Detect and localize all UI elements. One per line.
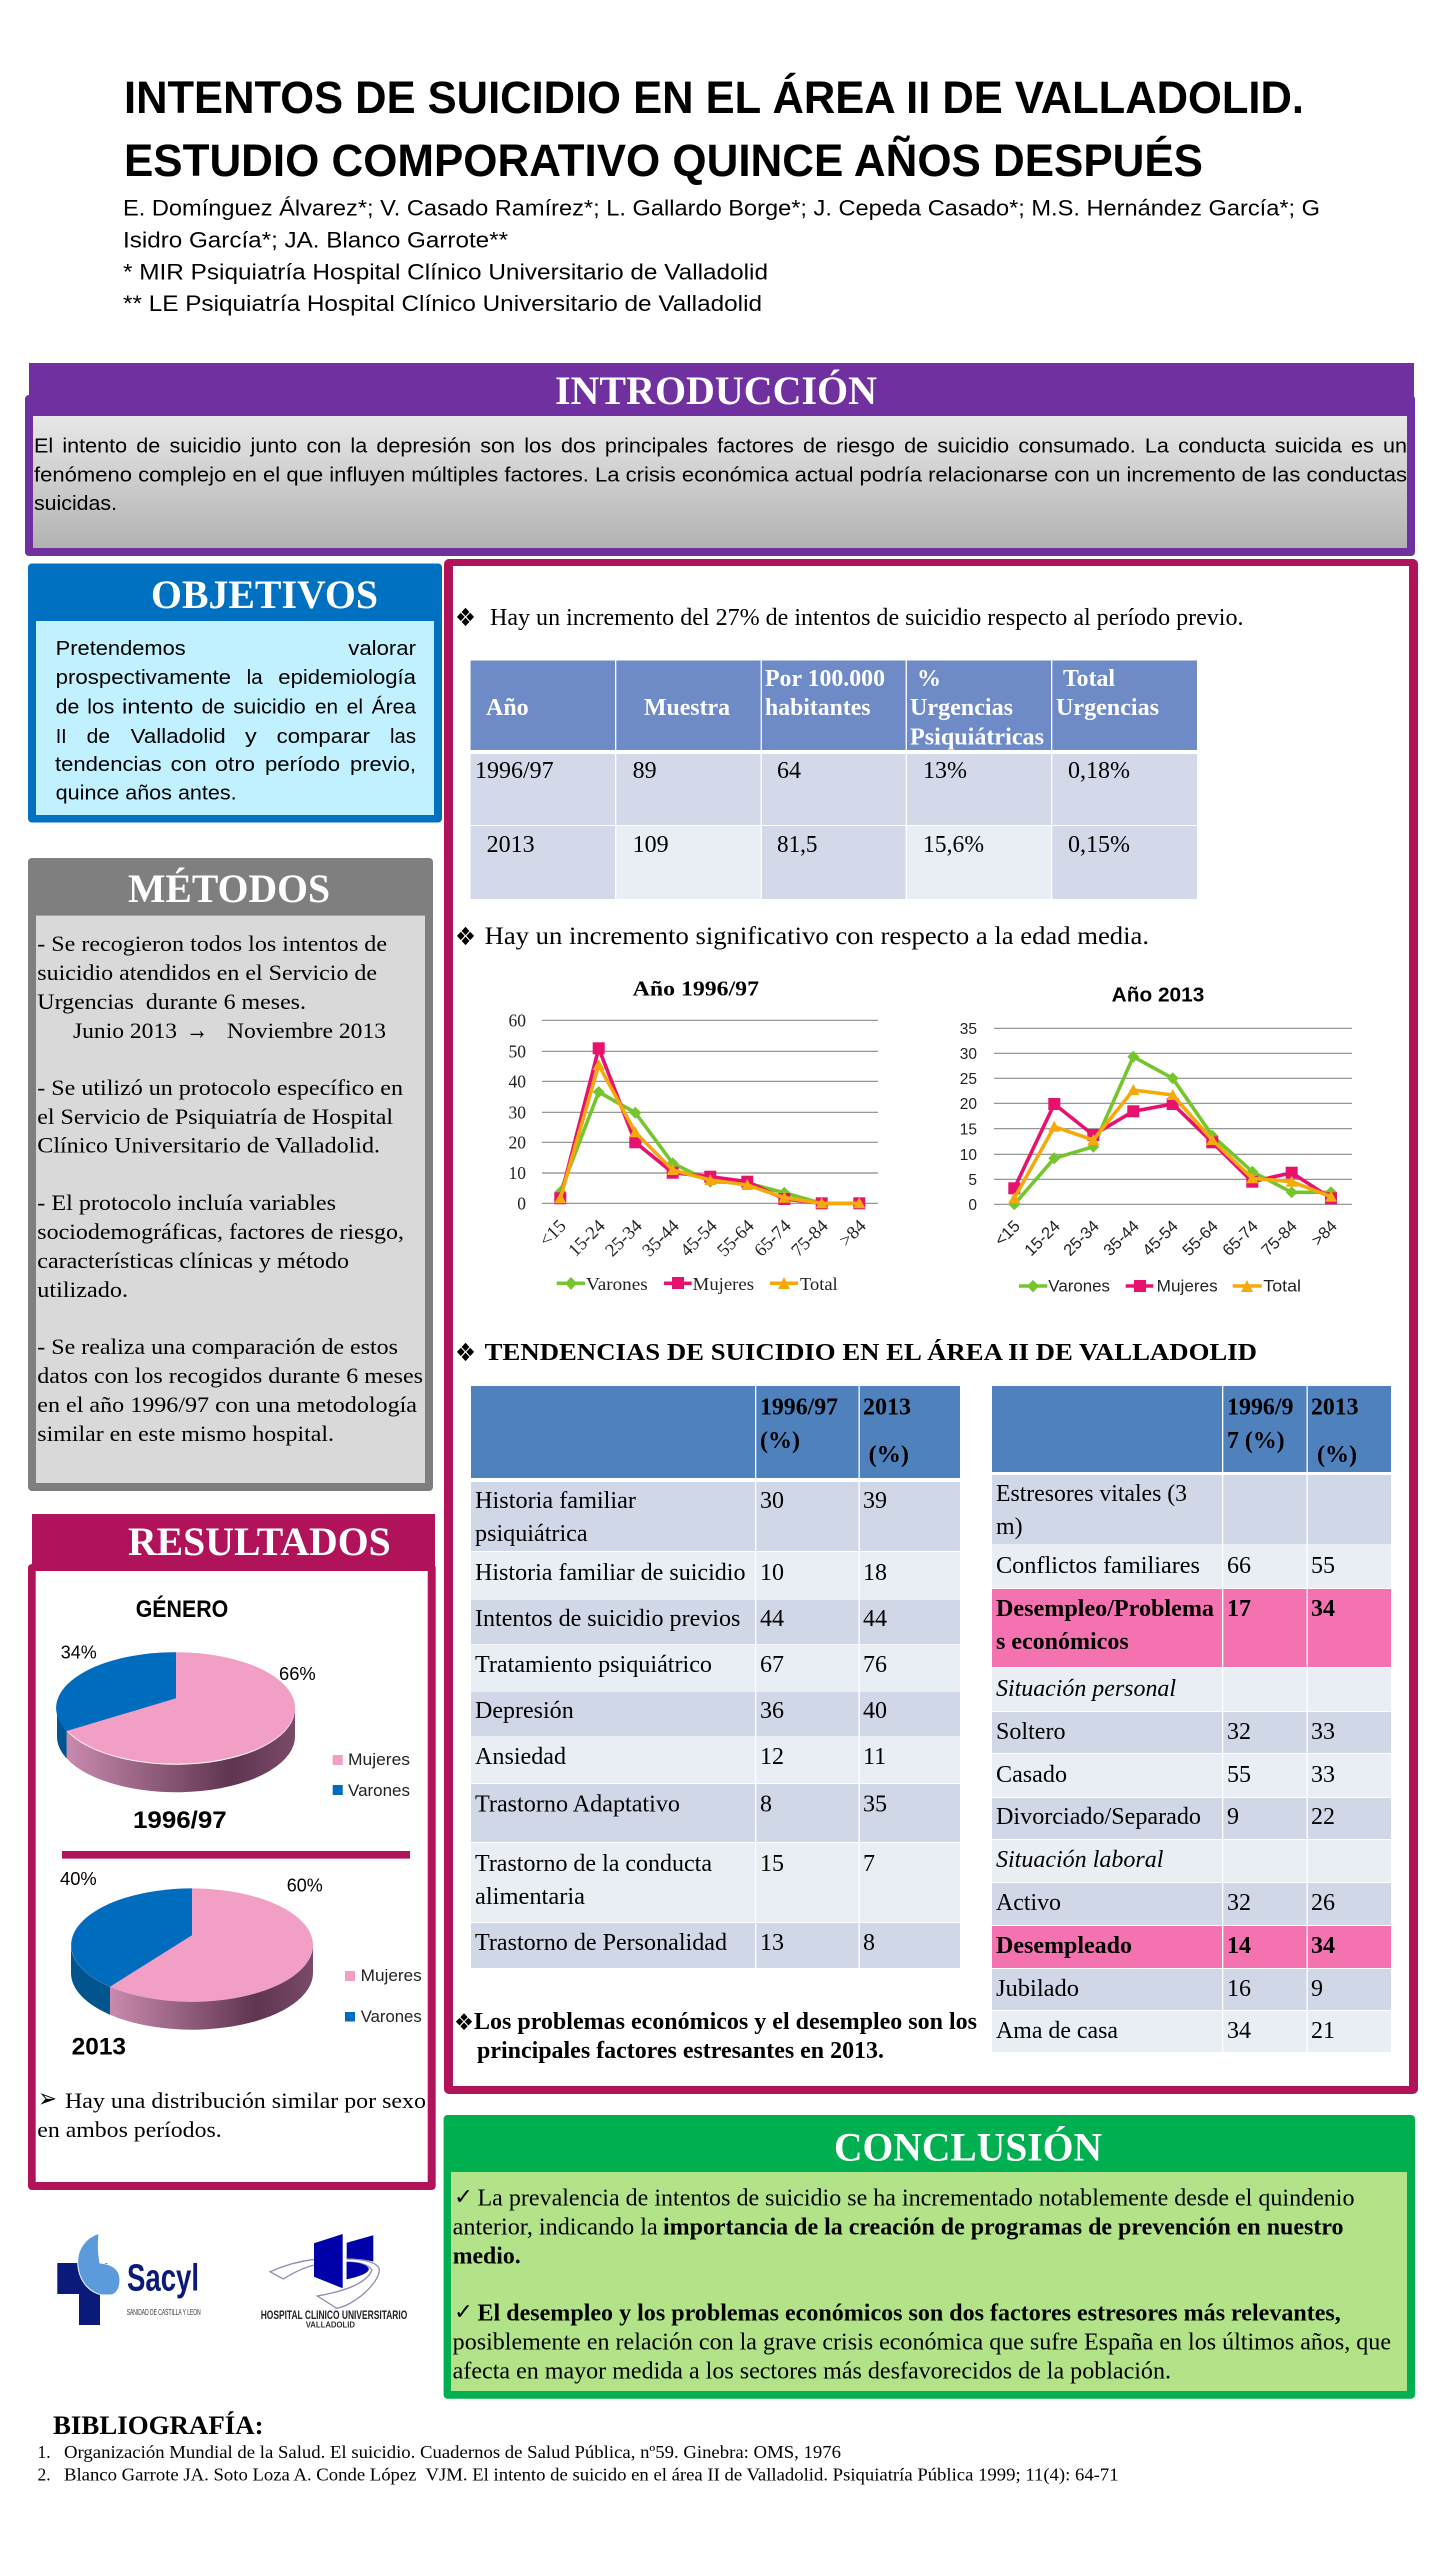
pie chart: 2013: 40% <box>60 1869 97 1889</box>
text: conclusión: posiblemente en relación con la grave crisis económica que sufre España en los últimos años, que <box>453 2329 1391 2355</box>
text: métodos: suicidio atendidos en el Servicio de <box>37 960 377 985</box>
table: estresores: Situación laboral <box>996 1847 1164 1873</box>
table: factores clínicos: 15 <box>760 1851 784 1877</box>
text: objetivos: con <box>171 753 207 776</box>
text: objetivos: tendencias <box>55 753 162 776</box>
line chart: año 1996/97: 60 <box>508 1010 526 1030</box>
text: métodos: el Servicio de Psiquiatría de Hospital <box>37 1104 393 1129</box>
line chart: año 1996/97: >84 <box>836 1216 871 1251</box>
table: muestra: Por 100.000 <box>765 666 885 692</box>
text: métodos: - Se recogieron todos los intentos de <box>37 931 387 956</box>
line chart: año 1996/97: Total <box>800 1274 838 1294</box>
table: factores clínicos: Trastorno de Personalidad <box>475 1930 727 1956</box>
table: estresores: 1996/9 <box>1227 1395 1294 1421</box>
logo: Sacyl: Sacyl <box>127 2258 199 2300</box>
text: conclusión: afecta en mayor medida a los sectores más desfavorecidos de la población. <box>453 2358 1171 2384</box>
line chart: año 2013: 0 <box>968 1197 977 1214</box>
line chart: año 2013: 5 <box>968 1172 977 1189</box>
table: estresores: Estresores vitales (3 <box>996 1481 1187 1507</box>
text: objetivos: prospectivamente <box>56 666 231 689</box>
pie chart: 2013 <box>60 1869 323 2030</box>
text: objetivos: período <box>265 753 340 776</box>
table: estresores: 33 <box>1311 1762 1335 1788</box>
table: estresores: Desempleo/Problema <box>996 1596 1214 1622</box>
table: muestra: 109 <box>633 832 669 858</box>
table: factores clínicos: 7 <box>863 1851 875 1877</box>
table: factores clínicos: 39 <box>863 1488 887 1514</box>
table: factores clínicos: 44 <box>863 1606 887 1632</box>
text: métodos <box>37 931 423 1446</box>
table: estresores: 14 <box>1227 1933 1251 1959</box>
panel: introducción <box>25 363 1415 556</box>
text: métodos: - Se realiza una comparación de estos <box>37 1334 398 1359</box>
table: factores clínicos: Trastorno de la conducta <box>475 1851 712 1877</box>
table: factores clínicos: Intentos de suicidio previos <box>475 1606 740 1632</box>
text: distribución por sexo <box>37 2084 426 2142</box>
table: estresores: 66 <box>1227 1553 1251 1579</box>
text: métodos: Clínico Universitario de Valladolid. <box>37 1133 380 1158</box>
line chart: año 1996/97: 10 <box>508 1163 526 1183</box>
table: factores clínicos: 30 <box>760 1488 784 1514</box>
table: factores clínicos: 40 <box>863 1698 887 1724</box>
line chart: año 1996/97: 25-34 <box>602 1216 647 1261</box>
line chart: año 2013: 10 <box>960 1147 977 1164</box>
legend: 1996/97 <box>333 1750 410 1800</box>
table: estresores: (%) <box>1317 1442 1357 1468</box>
line chart: año 1996/97: Año 1996/97 <box>633 977 759 1001</box>
line chart: año 2013: 75-84 <box>1258 1217 1301 1260</box>
text: métodos: Junio 2013 <box>73 1018 177 1043</box>
text: métodos: Noviembre 2013 <box>227 1018 386 1043</box>
table: estresores: 2013 <box>1311 1395 1358 1421</box>
bibliography: 1. <box>38 2442 51 2462</box>
table: estresores: 26 <box>1311 1890 1335 1916</box>
table: estresores <box>992 1386 1391 2052</box>
table: estresores: 33 <box>1311 1719 1335 1745</box>
text: conclusión: ✓ <box>454 2185 473 2210</box>
table: factores clínicos: 8 <box>863 1930 875 1956</box>
table: estresores: 17 <box>1227 1596 1251 1622</box>
table: estresores: Jubilado <box>996 1976 1079 2002</box>
table: factores clínicos: 36 <box>760 1698 784 1724</box>
line chart: año 2013: 65-74 <box>1219 1217 1262 1260</box>
line chart: año 1996/97: <15 <box>536 1216 571 1251</box>
table: factores clínicos: Trastorno Adaptativo <box>475 1792 680 1818</box>
label: 1996/97: 1996/97 <box>133 1807 227 1834</box>
text: distribución por sexo: ➢ <box>38 2084 57 2114</box>
logo: Sacyl <box>57 2233 201 2325</box>
table: estresores: 9 <box>1227 1804 1239 1830</box>
text: factores estresantes: principales factores estresantes en 2013. <box>477 2038 884 2064</box>
pie chart: 1996/97: 66% <box>279 1664 316 1684</box>
line chart: año 1996/97 <box>508 977 878 1294</box>
heading: objetivos: OBJETIVOS <box>151 572 378 617</box>
text: objetivos <box>55 637 417 804</box>
text: métodos: en el año 1996/97 con una metodología <box>37 1392 417 1417</box>
line chart: año 2013: 15 <box>960 1122 977 1138</box>
line chart: año 1996/97: 0 <box>517 1194 526 1214</box>
line chart: año 1996/97: 50 <box>508 1042 526 1062</box>
table: muestra <box>471 660 1197 900</box>
table: estresores: 21 <box>1311 2018 1335 2044</box>
text: métodos: → <box>186 1015 208 1046</box>
text: métodos: datos con los recogidos durante 6 meses <box>37 1363 423 1388</box>
line chart: año 2013: 20 <box>960 1096 977 1113</box>
line chart: año 1996/97: 75-84 <box>788 1216 833 1261</box>
logo: Hospital Clínico Universitario: VALLADOLID <box>306 2320 355 2330</box>
table: muestra: Urgencias <box>1056 695 1159 721</box>
pie chart: 2013: 60% <box>287 1876 323 1896</box>
heading: tendencias: ❖ <box>455 1338 476 1367</box>
line chart: año 1996/97: 55-64 <box>714 1216 759 1261</box>
authors and affiliations: ** LE Psiquiatría Hospital Clínico Universitario de Valladolid <box>123 291 762 316</box>
table: estresores: Activo <box>996 1890 1061 1916</box>
text: objetivos: Área <box>372 696 417 718</box>
table: estresores: m) <box>996 1514 1023 1540</box>
table: muestra: 64 <box>777 758 801 784</box>
bibliography: Blanco Garrote JA. Soto Loza A. Conde López VJM. El intento de suicido en el área II de Valladolid. Psiquiatría Pública 1999; 11(4): 64-71 <box>64 2465 1119 2485</box>
line chart: año 2013: 45-54 <box>1139 1217 1182 1260</box>
table: estresores: Soltero <box>996 1719 1066 1745</box>
title: ESTUDIO COMPORATIVO QUINCE AÑOS DESPUÉS <box>124 135 1203 186</box>
legend: 2013 <box>345 1966 422 2026</box>
table: factores clínicos <box>471 1386 960 1968</box>
legend: 1996/97: Mujeres <box>348 1750 410 1769</box>
logo: Sacyl: SANIDAD DE CASTILLA Y LEON <box>127 2308 201 2317</box>
panel: conclusión <box>444 2115 1415 2399</box>
bibliography: BIBLIOGRAFÍA: <box>53 2411 264 2440</box>
text: introducción: El intento de suicidio junto con la depresión son los dos principales factores de riesgo de suicidio consumado. La conducta suicida es un <box>34 436 1407 458</box>
table: muestra: 0,15% <box>1068 832 1130 858</box>
panel: resultados género <box>28 1514 436 2190</box>
table: estresores: 55 <box>1311 1553 1335 1579</box>
text: distribución por sexo: en ambos períodos. <box>37 2117 222 2142</box>
text: incremento 27%: ❖ <box>455 603 476 632</box>
text: incremento 27%: Hay un incremento del 27% de intentos de suicidio respecto al período previo. <box>490 605 1244 631</box>
table: estresores: Casado <box>996 1762 1067 1788</box>
text: objetivos: comparar <box>277 725 370 748</box>
line chart: año 2013: 25 <box>960 1071 977 1088</box>
text: conclusión: medio. <box>453 2243 521 2269</box>
table: factores clínicos: Historia familiar de suicidio <box>475 1560 746 1586</box>
table: estresores: 7 (%) <box>1227 1428 1285 1454</box>
text: objetivos: suicidio <box>233 696 306 718</box>
line chart: año 2013: 55-64 <box>1179 1217 1222 1260</box>
line chart: año 2013 <box>960 985 1352 1296</box>
text: objetivos: Valladolid <box>131 725 226 748</box>
text: factores estresantes: ❖ <box>454 2010 474 2036</box>
authors and affiliations <box>123 196 1320 316</box>
text: conclusión: El desempleo y los problemas económicos son dos factores estresores más relevantes, <box>478 2301 1341 2327</box>
text: métodos: Urgencias durante 6 meses. <box>37 989 306 1014</box>
table: muestra: 15,6% <box>923 832 984 858</box>
table: factores clínicos: 18 <box>863 1560 887 1586</box>
table: factores clínicos: Depresión <box>475 1698 574 1724</box>
text: objetivos: de <box>56 696 79 718</box>
text: introducción: fenómeno complejo en el que influyen múltiples factores. La crisis económica actual podría relacionarse con un incremento de las conductas <box>34 464 1407 486</box>
text: objetivos: Pretendemos <box>56 637 186 660</box>
heading: introducción: INTRODUCCIÓN <box>555 368 877 413</box>
line chart: año 2013: 15-24 <box>1021 1217 1064 1260</box>
table: factores clínicos: Historia familiar <box>475 1488 636 1514</box>
table: muestra: Total <box>1063 666 1115 692</box>
table: factores clínicos: 8 <box>760 1792 772 1818</box>
authors and affiliations: E. Domínguez Álvarez*; V. Casado Ramírez*; L. Gallardo Borge*; J. Cepeda Casado*; M.S. Hernández García*; G <box>123 196 1320 220</box>
table: factores clínicos: alimentaria <box>475 1884 585 1910</box>
text: conclusión: ✓ <box>454 2300 473 2325</box>
table: estresores: Conflictos familiares <box>996 1553 1200 1579</box>
heading: género: GÉNERO <box>136 1595 228 1623</box>
line chart: año 1996/97: 65-74 <box>751 1216 796 1261</box>
text: edad media: Hay un incremento significativo con respecto a la edad media. <box>485 923 1149 950</box>
line chart: año 1996/97: 20 <box>508 1132 526 1152</box>
table: factores clínicos: 13 <box>760 1930 784 1956</box>
table: factores clínicos: 10 <box>760 1560 784 1586</box>
line chart: año 1996/97: 40 <box>508 1072 526 1092</box>
text: métodos: similar en este mismo hospital. <box>37 1421 334 1446</box>
table: estresores: 34 <box>1311 1933 1335 1959</box>
text: objetivos: valorar <box>348 637 416 660</box>
table: estresores: Desempleado <box>996 1933 1132 1959</box>
table: muestra: Urgencias <box>910 695 1013 721</box>
table: muestra: Psiquiátricas <box>910 725 1044 751</box>
table: estresores: 32 <box>1227 1890 1251 1916</box>
text: edad media: ❖ <box>455 922 476 951</box>
bibliography <box>38 2411 1119 2485</box>
table: muestra: habitantes <box>765 695 870 721</box>
table: estresores: Divorciado/Separado <box>996 1804 1201 1830</box>
text: objetivos: intento <box>122 696 193 718</box>
table: muestra: 81,5 <box>777 832 818 858</box>
authors and affiliations: Isidro García*; JA. Blanco Garrote** <box>123 228 508 252</box>
table: muestra: 0,18% <box>1068 758 1130 784</box>
text: objetivos: las <box>390 725 416 748</box>
table: factores clínicos: Ansiedad <box>475 1744 566 1770</box>
table: estresores: 32 <box>1227 1719 1251 1745</box>
heading: métodos: MÉTODOS <box>128 866 330 911</box>
line chart: año 2013: 35 <box>960 1021 977 1038</box>
pie chart: 1996/97: 34% <box>61 1642 97 1662</box>
line chart: año 1996/97: 35-44 <box>639 1216 684 1261</box>
table: estresores: Ama de casa <box>996 2018 1118 2044</box>
table: factores clínicos: (%) <box>869 1442 909 1468</box>
table: estresores: Situación personal <box>996 1676 1176 1702</box>
text: introducción: suicidas. <box>34 493 117 515</box>
table: muestra: 2013 <box>487 832 535 858</box>
table: factores clínicos: 2013 <box>863 1395 911 1421</box>
line chart: año 1996/97: 30 <box>508 1102 526 1122</box>
table: estresores: 55 <box>1227 1762 1251 1788</box>
line chart: año 2013: Mujeres <box>1157 1278 1218 1296</box>
table: factores clínicos: 12 <box>760 1744 784 1770</box>
table: muestra: Muestra <box>644 695 730 721</box>
text: objetivos: en <box>315 696 338 718</box>
legend: 2013: Varones <box>361 2007 422 2026</box>
panel: métodos <box>28 858 433 1491</box>
bibliography: Organización Mundial de la Salud. El suicidio. Cuadernos de Salud Pública, nº59. Ginebra: OMS, 1976 <box>64 2442 841 2462</box>
text: métodos: utilizado. <box>37 1277 128 1302</box>
table: muestra: 13% <box>923 758 967 784</box>
title: INTENTOS DE SUICIDIO EN EL ÁREA II DE VALLADOLID. <box>124 72 1304 123</box>
text: métodos: sociodemográficas, factores de riesgo, <box>37 1219 404 1244</box>
line chart: año 1996/97: 45-54 <box>677 1216 722 1261</box>
line chart: año 2013: 25-34 <box>1060 1217 1103 1260</box>
text: factores estresantes <box>454 2009 977 2064</box>
text: objetivos: epidemiología <box>278 666 417 689</box>
text: conclusión <box>453 2185 1391 2384</box>
text: objetivos: y <box>245 725 258 748</box>
table: estresores: 22 <box>1311 1804 1335 1830</box>
text: objetivos: otro <box>215 753 255 776</box>
text: objetivos: II <box>56 725 67 748</box>
text: métodos: - Se utilizó un protocolo específico en <box>37 1075 403 1100</box>
text: métodos: - El protocolo incluía variables <box>37 1190 336 1215</box>
text: objetivos: la <box>247 666 263 689</box>
panel: objetivos <box>28 564 442 822</box>
text: métodos: características clínicas y método <box>37 1248 349 1273</box>
heading: resultados: RESULTADOS <box>128 1519 391 1564</box>
line chart: año 1996/97: Mujeres <box>693 1274 754 1294</box>
legend: 2013: Mujeres <box>361 1966 422 1985</box>
panel: resultados principales <box>444 559 1418 2094</box>
table: factores clínicos: 1996/97 <box>760 1395 838 1421</box>
text: conclusión: importancia de la creación de programas de prevención en nuestro <box>663 2214 1344 2240</box>
table: factores clínicos: Tratamiento psiquiátrico <box>475 1652 712 1678</box>
text: conclusión: anterior, indicando la <box>453 2214 658 2240</box>
table: muestra: 89 <box>633 758 657 784</box>
table: muestra: % <box>917 666 941 692</box>
text: introducción <box>34 436 1407 515</box>
table: factores clínicos: psiquiátrica <box>475 1521 588 1547</box>
line chart: año 1996/97: 15-24 <box>565 1216 610 1261</box>
pie chart: 1996/97 <box>56 1642 316 1792</box>
label: 2013: 2013 <box>72 2034 126 2061</box>
table: muestra: 1996/97 <box>475 758 554 784</box>
bibliography: 2. <box>38 2465 51 2485</box>
line chart: año 2013: Varones <box>1048 1278 1110 1296</box>
legend: 1996/97: Varones <box>348 1781 410 1800</box>
table: factores clínicos: (%) <box>760 1428 800 1454</box>
text: objetivos: de <box>87 725 110 748</box>
line chart: año 2013: <15 <box>991 1217 1024 1250</box>
line chart: año 2013: Año 2013 <box>1112 985 1204 1007</box>
table: factores clínicos: 11 <box>863 1744 886 1770</box>
text: factores estresantes: Los problemas económicos y el desempleo son los <box>474 2009 977 2035</box>
text: distribución por sexo: Hay una distribución similar por sexo <box>65 2088 426 2113</box>
text: objetivos: previo, <box>350 753 416 776</box>
table: estresores: s económicos <box>996 1629 1129 1655</box>
table: muestra: Año <box>486 695 529 721</box>
table: estresores: 34 <box>1227 2018 1251 2044</box>
title <box>124 72 1304 186</box>
line chart: año 2013: 30 <box>960 1046 977 1063</box>
line chart: año 2013: Total <box>1263 1278 1301 1296</box>
table: estresores: 34 <box>1311 1596 1335 1622</box>
line chart: año 2013: 35-44 <box>1100 1217 1143 1260</box>
line chart: año 1996/97: Varones <box>586 1274 648 1294</box>
text: objetivos: quince años antes. <box>56 782 237 804</box>
table: factores clínicos: 35 <box>863 1792 887 1818</box>
text: objetivos: de <box>202 696 225 718</box>
table: factores clínicos: 44 <box>760 1606 784 1632</box>
text: objetivos: los <box>87 696 114 718</box>
logo: Hospital Clínico Universitario <box>261 2234 407 2330</box>
table: estresores: 9 <box>1311 1976 1323 2002</box>
logo: Hospital Clínico Universitario: HOSPITAL CLINICO UNIVERSITARIO <box>261 2310 407 2322</box>
heading: conclusión: CONCLUSIÓN <box>834 2125 1102 2170</box>
text: objetivos: el <box>347 696 363 718</box>
authors and affiliations: * MIR Psiquiatría Hospital Clínico Universitario de Valladolid <box>123 260 768 284</box>
table: factores clínicos: 76 <box>863 1652 887 1678</box>
heading: tendencias: TENDENCIAS DE SUICIDIO EN EL ÁREA II DE VALLADOLID <box>485 1340 1257 1366</box>
text: conclusión: La prevalencia de intentos de suicidio se ha incrementado notablemente desde el quindenio <box>478 2186 1354 2212</box>
table: factores clínicos: 67 <box>760 1652 784 1678</box>
line chart: año 2013: >84 <box>1308 1217 1341 1250</box>
table: estresores: 16 <box>1227 1976 1251 2002</box>
